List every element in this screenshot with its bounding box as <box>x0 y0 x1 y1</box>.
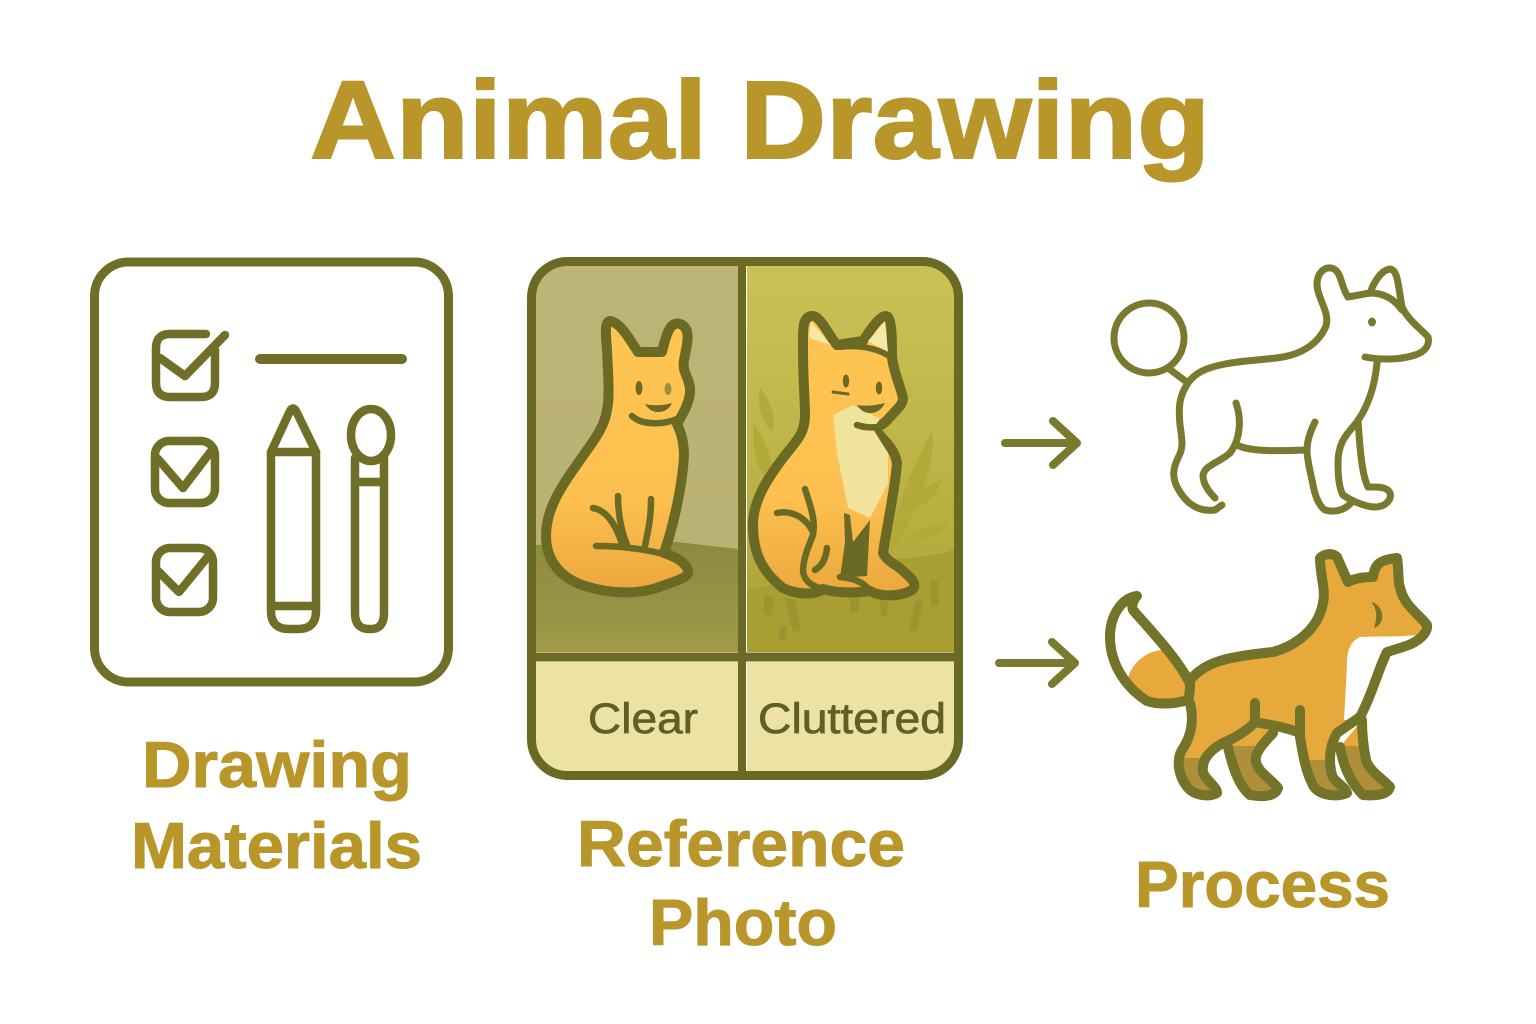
animal: sketch dog <box>1114 268 1428 511</box>
panel: drawing materials <box>94 262 448 682</box>
arrow: to sketch <box>1005 421 1077 465</box>
icon: checkbox 2 <box>155 441 215 503</box>
caption: cluttered: Cluttered <box>758 695 946 743</box>
caption: clear: Clear <box>588 695 698 743</box>
icon: checkbox 1 <box>156 334 225 397</box>
label: drawing materials: Materials <box>131 809 422 882</box>
dark leg tips <box>1184 746 1384 792</box>
animal: cluttered fox <box>753 316 914 595</box>
animal: finished fox <box>1110 554 1427 800</box>
icon: pencil <box>271 408 316 629</box>
label cells <box>535 662 955 772</box>
title: Animal Drawing <box>310 59 1210 182</box>
photo background: cluttered <box>747 266 955 652</box>
dog eye <box>1368 318 1376 326</box>
arrow: to finished <box>999 642 1075 684</box>
label: reference photo: Photo <box>649 886 837 959</box>
label: process: Process <box>1135 848 1390 921</box>
label: reference photo <box>577 807 905 959</box>
label: drawing materials <box>131 728 422 882</box>
panel frame and dividers <box>532 262 958 776</box>
fox body fill <box>1190 554 1427 743</box>
tail circle <box>1114 303 1184 373</box>
line: list rule <box>260 354 402 364</box>
tail <box>1110 596 1190 703</box>
dog outline <box>1168 268 1428 511</box>
label: drawing materials: Drawing <box>142 728 412 801</box>
photo background: clear <box>535 266 738 652</box>
fox legs fill <box>1179 700 1390 796</box>
animal: clear cat <box>546 321 690 592</box>
fox outline <box>1110 554 1427 796</box>
panel: reference photo <box>532 262 958 776</box>
panel frame <box>94 262 448 682</box>
white chest <box>1344 635 1418 720</box>
icon: paintbrush <box>351 409 391 629</box>
fox eye <box>1373 603 1382 627</box>
icon: checkbox 3 <box>156 548 213 612</box>
label: reference photo: Reference <box>577 807 905 880</box>
